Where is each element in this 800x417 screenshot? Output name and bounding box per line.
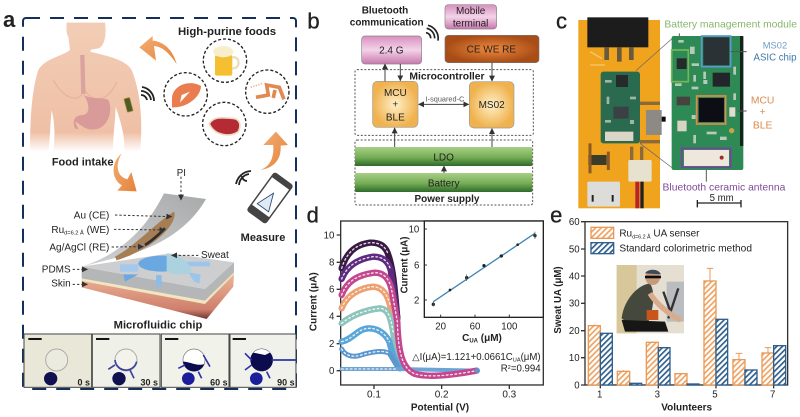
- food: beer mug: [203, 39, 247, 82]
- icon: wireless signal from arm: [141, 87, 154, 101]
- inset calibration chart: 2: [414, 295, 419, 306]
- box: mobile terminal: [445, 5, 497, 29]
- y tick labels: 2: [329, 339, 334, 350]
- y tick labels: 0: [574, 380, 580, 391]
- power supply dashed group: [355, 140, 533, 205]
- heading: microfluidic chip: Microfluidic chip: [114, 320, 202, 332]
- box: 2.4 G: 2.4 G: [379, 45, 404, 56]
- inset calibration chart: 10: [409, 224, 419, 235]
- box: CE WE RE: CE WE RE: [467, 45, 516, 56]
- label: ASIC chip: ASIC chip: [754, 53, 796, 64]
- panel label d: d: [307, 202, 319, 227]
- label: food intake: Food intake: [52, 156, 113, 168]
- x axis title: Volunteers: [661, 403, 713, 414]
- y tick labels: [324, 230, 335, 377]
- y tick labels: 8: [329, 258, 334, 269]
- R squared: 2: [508, 365, 511, 371]
- chip labels and photo strip: Ag/AgCl (RE): [49, 243, 109, 254]
- y tick labels: 30: [569, 299, 580, 310]
- y tick labels: 10: [324, 230, 334, 241]
- inset calibration chart: 20: [435, 322, 446, 333]
- y axis title: Current (μA): [309, 272, 320, 331]
- regression equation: (μM): [521, 352, 541, 363]
- microfluidic channels: [120, 253, 210, 287]
- highlight: MCU box: [697, 96, 726, 124]
- regression equation: UA: [513, 357, 521, 363]
- x axis title: Potential (V): [411, 402, 469, 413]
- label: bluetooth: Bluetooth: [362, 5, 408, 16]
- R squared: R: [501, 364, 508, 375]
- legend: [591, 227, 752, 254]
- inset calibration chart: Current (μA): [399, 237, 410, 293]
- regression equation: △I(μA)=1.121+0.0661C: [412, 352, 513, 363]
- y tick labels: 50: [569, 244, 580, 255]
- y tick labels: 6: [329, 285, 334, 296]
- dashed panel frame: [23, 18, 296, 389]
- label: bluetooth ceramic antenna: Bluetooth ceramic antenna: [663, 183, 786, 194]
- food circles: [52, 36, 289, 191]
- photo 90 s: 90 s: [277, 377, 295, 387]
- photo 60 s: 60 s: [210, 377, 228, 387]
- icon: wireless signal: [426, 25, 438, 41]
- box: mobile terminal: Mobile: [456, 6, 486, 17]
- x tick labels: 0.2: [435, 390, 449, 401]
- box: MCU + BLE: BLE: [386, 112, 405, 123]
- label: PI: PI: [177, 168, 186, 179]
- chip labels and photo strip: [24, 177, 296, 387]
- box: mobile terminal: terminal: [453, 18, 488, 29]
- photo: volunteer on exercise bike: [617, 265, 684, 333]
- food: shrimp: [246, 70, 289, 113]
- legend: Ru: [619, 229, 632, 240]
- y axis title: Sweat UA (μM): [553, 266, 564, 334]
- inset calibration chart: UA: [469, 339, 479, 345]
- label: MCU + BLE: MCU: [751, 95, 774, 106]
- highlight: ASIC chip box: [702, 36, 731, 67]
- photo: flexible PCB: [578, 17, 666, 208]
- bars: colorimetric series: [600, 319, 786, 385]
- label: MS02: MS02: [763, 40, 787, 50]
- box: MCU + BLE: +: [392, 99, 398, 110]
- x tick labels: 0.1: [367, 390, 381, 401]
- label: MCU + BLE: [751, 95, 774, 131]
- panel label a: a: [3, 7, 16, 32]
- y tick labels: 10: [569, 353, 580, 364]
- chip labels and photo strip: Ru: [51, 225, 64, 236]
- skin layer: [82, 272, 234, 319]
- box: CE WE RE: [445, 35, 539, 63]
- chip labels and photo strip: (WE): [84, 225, 109, 236]
- inset calibration chart: C: [462, 333, 469, 344]
- micro USB port: [587, 182, 620, 207]
- icon: bluetooth signal near phone: [236, 171, 251, 185]
- food: salmon: [164, 73, 207, 116]
- curves: [342, 243, 480, 376]
- legend: d=6.2 Å: [632, 233, 651, 240]
- chip labels and photo strip: Skin: [51, 279, 71, 290]
- photo 60 s: [161, 334, 229, 387]
- inset calibration chart: 6: [414, 260, 419, 271]
- arrow: food intake to chip: [114, 153, 137, 191]
- connecting arrows: [385, 63, 492, 173]
- label: measure: Measure: [241, 232, 285, 244]
- green module: [601, 72, 640, 143]
- error bars: [594, 268, 771, 371]
- photo 30 s: [92, 334, 160, 387]
- chart: DPV curves: [337, 221, 543, 389]
- panel d: voltammetry chart: [307, 202, 543, 413]
- illustration: human torso with stomach: [30, 23, 141, 152]
- panel label c: c: [556, 8, 567, 33]
- x tick labels: 5: [712, 390, 718, 401]
- microcontroller dashed group: [355, 70, 533, 135]
- small components: [588, 155, 607, 165]
- label: MCU + BLE: BLE: [753, 120, 773, 131]
- chip labels and photo strip: PDMS: [42, 264, 71, 275]
- box: MCU + BLE: [373, 81, 418, 127]
- icon: smartphone with measurement curve: [246, 172, 294, 224]
- x tick labels: [597, 390, 775, 401]
- illustration: microfluidic chip block: [82, 193, 234, 319]
- panel label e: e: [550, 202, 562, 227]
- black connector: [587, 17, 648, 47]
- scale bar: 5 mm: 5 mm: [710, 193, 734, 204]
- x tick labels: 1: [597, 390, 602, 401]
- highlight: battery module box: [672, 50, 688, 82]
- bar: battery: Battery: [428, 178, 459, 189]
- leader arrows: [73, 177, 198, 284]
- chip labels and photo strip: d=6.2 Å: [64, 230, 84, 237]
- y tick labels: [569, 217, 580, 391]
- box: 2.4 G: [362, 36, 422, 64]
- scale bar: 5 mm: [697, 193, 741, 207]
- photo 0 s: 0 s: [77, 377, 90, 387]
- panel label b: b: [307, 8, 320, 33]
- arrow: foods to person: [139, 36, 177, 64]
- food: steak: [203, 102, 246, 146]
- cream layer: [82, 271, 234, 304]
- PDMS layer: [82, 262, 234, 301]
- leader lines: [679, 33, 747, 182]
- PI flexible electrode sheet: [82, 193, 206, 267]
- photo strip: dye spreading over time: [24, 334, 296, 387]
- label: power supply: Power supply: [415, 194, 480, 205]
- panel a: wearable system overview: [3, 7, 296, 389]
- highlight: antenna box: [682, 148, 731, 167]
- y tick labels: 20: [569, 326, 580, 337]
- box: MS02: [469, 82, 514, 128]
- y tick labels: 40: [569, 271, 580, 282]
- white JST connector: [628, 160, 652, 182]
- x tick labels: 3: [655, 390, 660, 401]
- panel b: circuit block diagram: [307, 5, 539, 205]
- y tick labels: 4: [329, 312, 335, 323]
- bars: Ru sensor series: [588, 281, 774, 385]
- x tick labels: 0.3: [502, 390, 517, 401]
- inset calibration chart: [399, 221, 543, 345]
- chip labels and photo strip: Sweat: [201, 250, 229, 261]
- inset calibration chart: 100: [501, 322, 517, 333]
- label: communication: communication: [350, 18, 424, 29]
- main axes: [341, 221, 543, 385]
- x tick labels: 7: [770, 390, 775, 401]
- label: I-squared-C: I-squared-C: [426, 94, 465, 103]
- x tick labels: [367, 390, 517, 401]
- slide switch: [646, 110, 662, 135]
- zoom lines: [636, 36, 675, 170]
- electrode and layer labels: Au (CE): [74, 210, 109, 221]
- heading: high-purine foods: High-purine foods: [178, 26, 276, 38]
- arrow: measure to foods: [260, 132, 288, 170]
- R squared: =0.994: [511, 364, 541, 375]
- chart axes: [581, 222, 788, 388]
- legend: Standard colorimetric method: [619, 243, 752, 254]
- y tick labels: 60: [569, 217, 580, 228]
- box: MS02: MS02: [479, 100, 505, 111]
- panel c: circuit board photo: [556, 8, 797, 208]
- legend: UA senser: [651, 229, 700, 240]
- bar: LDO: LDO: [433, 152, 454, 163]
- y tick labels: 0: [329, 366, 334, 377]
- photo 0 s: [24, 334, 92, 387]
- bar: LDO: [355, 147, 532, 166]
- label: MCU + BLE: +: [760, 107, 766, 118]
- gold electrode traces: [115, 212, 175, 260]
- photo 90 s: [230, 334, 296, 387]
- microcontroller dashed group: Microcontroller: [409, 71, 485, 82]
- photo: enlarged board: [672, 36, 743, 170]
- inset calibration chart: (μM): [478, 333, 502, 344]
- panel e: sweat uric acid bar chart: [550, 202, 788, 414]
- photo 30 s: 30 s: [140, 377, 158, 387]
- icon: arm sensor patch: [124, 97, 133, 112]
- label: battery management module: Battery management module: [664, 19, 797, 30]
- inset calibration chart: 60: [470, 322, 480, 333]
- bar: battery: [355, 173, 532, 192]
- box: MCU + BLE: MCU: [384, 88, 407, 99]
